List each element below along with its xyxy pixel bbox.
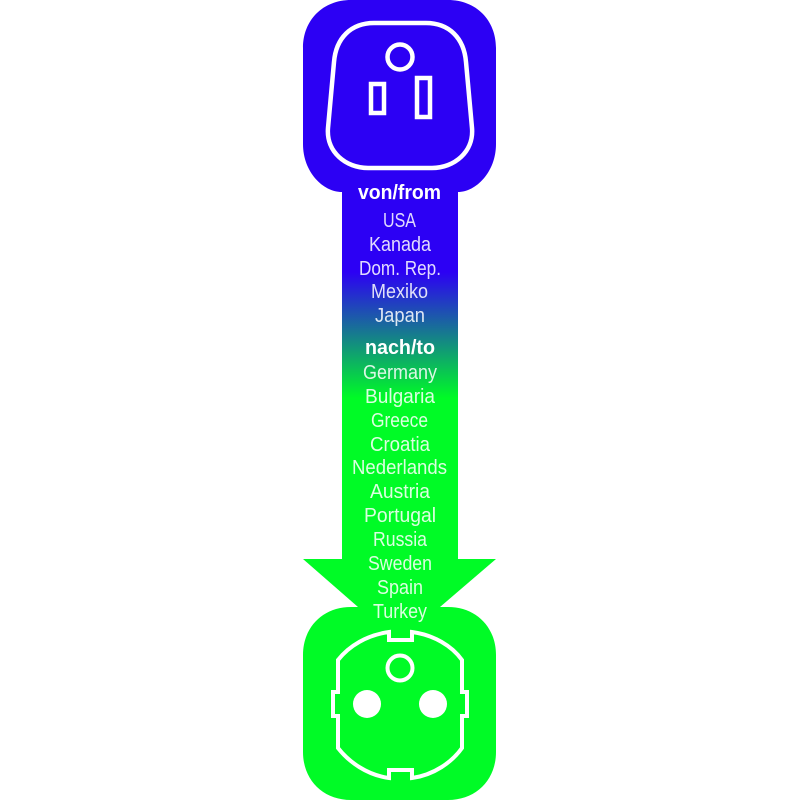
socket outline	[328, 23, 472, 168]
left pin hole	[353, 690, 381, 718]
country: Greece: Greece	[371, 410, 428, 432]
country: USA: USA	[383, 210, 417, 232]
icon: European Schuko socket	[333, 632, 467, 778]
country: Mexiko: Mexiko	[371, 281, 428, 303]
ground ring	[388, 656, 412, 680]
country: Portugal: Portugal	[364, 505, 436, 527]
country: Dom. Rep.: Dom. Rep.	[359, 258, 441, 280]
right pin hole	[419, 690, 447, 718]
country: Kanada: Kanada	[369, 234, 432, 256]
country: Nederlands: Nederlands	[352, 457, 447, 479]
country: Turkey: Turkey	[373, 601, 427, 623]
ground hole	[388, 44, 412, 70]
country: Austria: Austria	[370, 481, 431, 503]
left pin slot	[371, 84, 384, 113]
country: Sweden: Sweden	[368, 553, 432, 575]
icon: US plug socket	[328, 23, 472, 168]
socket outline	[333, 632, 467, 778]
right pin slot	[417, 78, 430, 117]
country: Spain: Spain	[377, 577, 423, 599]
country: Russia: Russia	[373, 529, 428, 551]
country: Croatia: Croatia	[370, 434, 431, 456]
country: Bulgaria: Bulgaria	[365, 386, 436, 408]
text block: to countries	[352, 337, 447, 623]
country: Germany: Germany	[363, 362, 437, 384]
text block: from countries	[358, 182, 441, 327]
heading: nach/to: nach/to	[365, 337, 435, 359]
arrow background shape	[303, 0, 496, 800]
heading: von/from: von/from	[358, 182, 441, 204]
country: Japan: Japan	[375, 305, 425, 327]
